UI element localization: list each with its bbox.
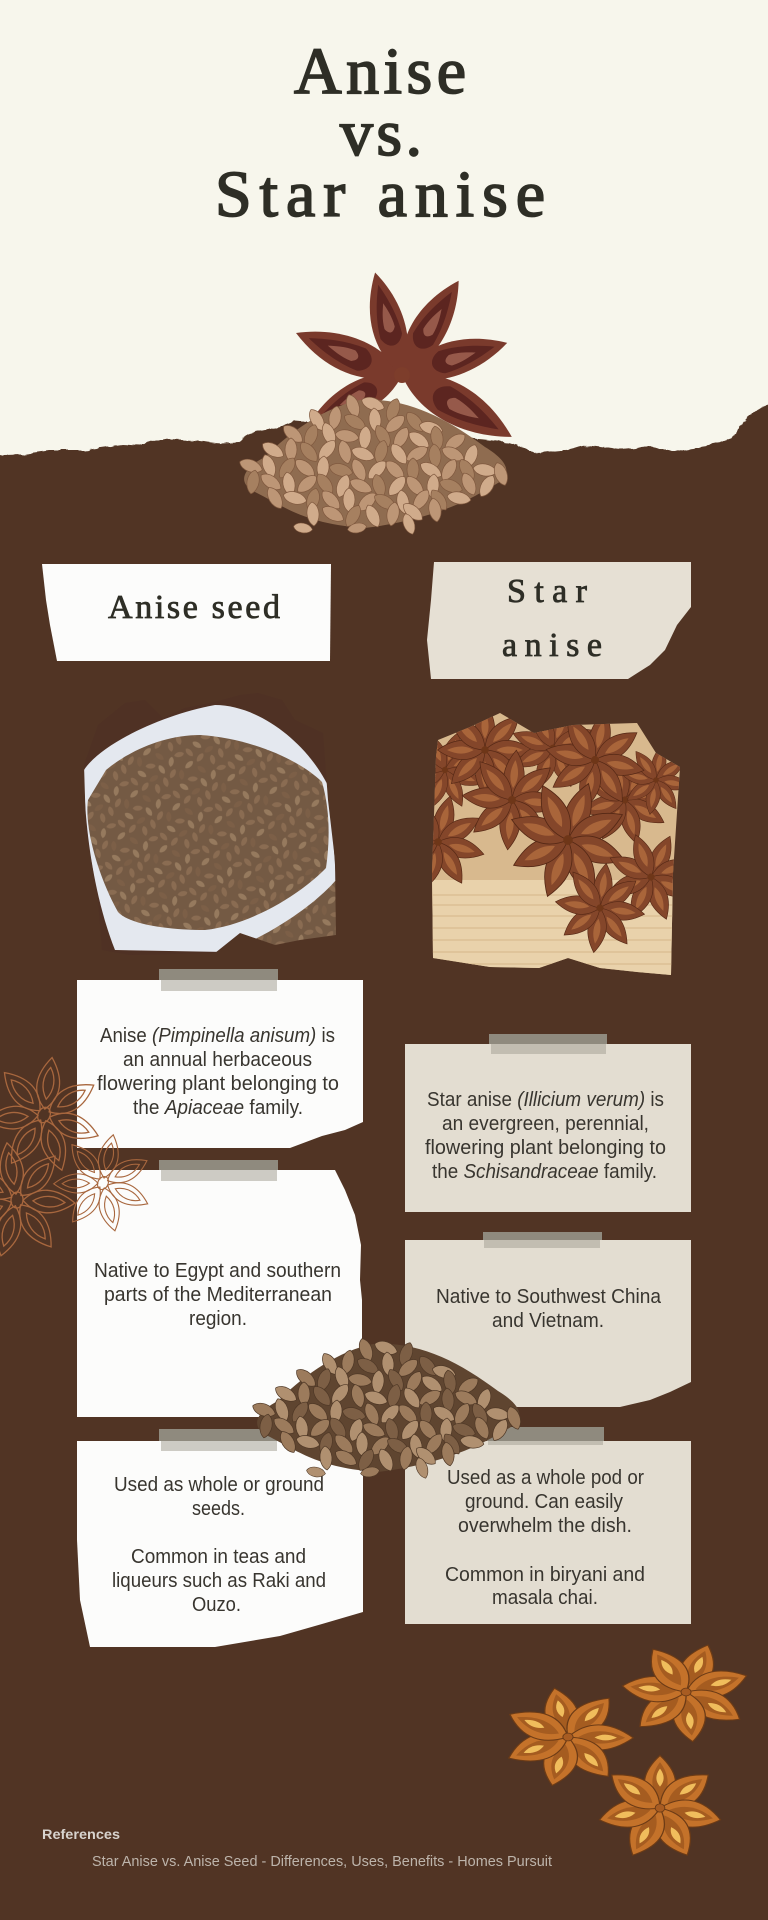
- card: anise origin: parts of the Mediterranean: [104, 1284, 332, 1306]
- references: [42, 1827, 552, 1870]
- hero seed pile: [238, 393, 511, 536]
- decorative outline flowers: [0, 1049, 162, 1266]
- title: Anise: [294, 35, 466, 108]
- card: anise uses: Ouzo.: [192, 1594, 241, 1616]
- card: star anise description: [405, 1034, 691, 1212]
- label: Anise seed: [42, 564, 331, 661]
- torn cream header band: [0, 0, 768, 455]
- card: anise uses: Used as whole or ground: [114, 1474, 324, 1496]
- card: star anise origin: [405, 1232, 691, 1407]
- label: Star anise: Star: [507, 573, 588, 610]
- references: Star Anise vs. Anise Seed - Differences, Uses, Benefits - Homes Pursuit: [92, 1854, 552, 1870]
- references: References: [42, 1827, 120, 1842]
- card: anise origin: region.: [189, 1308, 247, 1330]
- card: star anise uses: masala chai.: [492, 1587, 598, 1609]
- card: star anise uses: ground. Can easily: [465, 1491, 623, 1513]
- card: star anise origin: Native to Southwest China: [436, 1286, 662, 1308]
- title: vs.: [340, 97, 422, 170]
- card: star anise description: the Schisandraceae family.: [432, 1161, 657, 1183]
- label: Anise seed: Anise seed: [108, 589, 280, 626]
- card: anise description: an annual herbaceous: [123, 1049, 312, 1071]
- title: [215, 35, 545, 231]
- label: Star anise: [427, 562, 691, 679]
- card: anise description: flowering plant belonging to: [97, 1073, 339, 1095]
- card: anise uses: [77, 1429, 363, 1647]
- card: star anise origin: and Vietnam.: [492, 1310, 604, 1332]
- card: star anise uses: overwhelm the dish.: [458, 1515, 632, 1537]
- card: anise origin: [77, 1160, 362, 1417]
- photo: star anise on wood: [432, 713, 680, 975]
- seed pile over cards: [251, 1337, 524, 1480]
- label: Star anise: anise: [502, 627, 602, 664]
- card: star anise uses: Common in biryani and: [445, 1564, 645, 1586]
- photo: anise seeds in white bowl: [84, 705, 336, 952]
- card: star anise description: flowering plant belonging to: [425, 1137, 666, 1159]
- card: star anise description: an evergreen, perennial,: [442, 1113, 649, 1135]
- title: Star anise: [215, 158, 545, 231]
- card: anise description: Anise (Pimpinella anisum) is: [100, 1025, 335, 1047]
- card: anise uses: liqueurs such as Raki and: [112, 1570, 326, 1592]
- card: star anise uses: Used as a whole pod or: [447, 1467, 644, 1489]
- illustrated star anise trio: [489, 1627, 768, 1861]
- card: anise origin: Native to Egypt and southern: [94, 1260, 341, 1282]
- card: star anise description: Star anise (Illicium verum) is: [427, 1089, 664, 1111]
- card: anise description: the Apiaceae family.: [133, 1097, 303, 1119]
- card: star anise uses: [405, 1427, 691, 1624]
- hero star anise: [289, 268, 522, 453]
- card: anise uses: seeds.: [192, 1498, 245, 1520]
- card: anise description: [77, 969, 363, 1148]
- card: anise uses: Common in teas and: [131, 1546, 306, 1568]
